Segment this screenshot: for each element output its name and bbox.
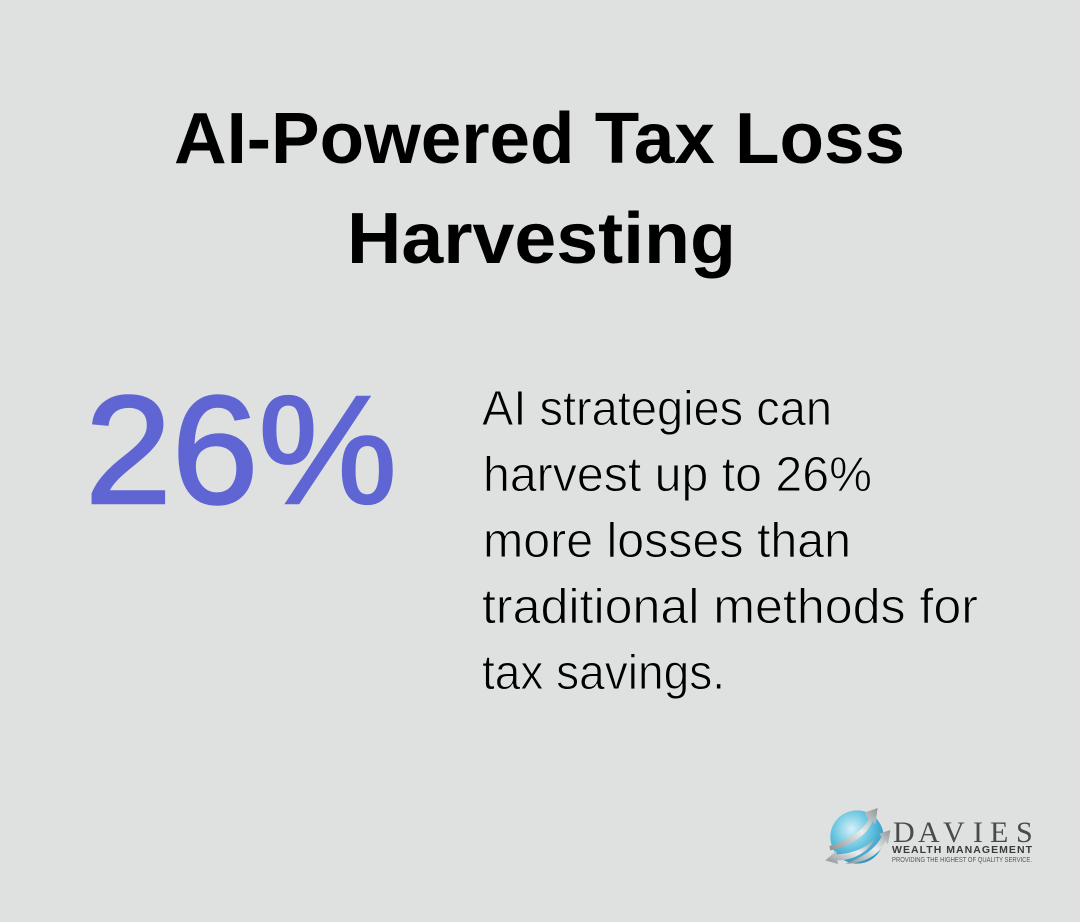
logo tagline: PROVIDING THE HIGHEST OF QUALITY SERVICE. [892, 855, 1032, 864]
description text: more losses than [483, 514, 851, 568]
title [174, 99, 905, 279]
title: AI-Powered Tax Loss [174, 99, 905, 179]
big statistic: 26%: 26% [85, 364, 397, 536]
icon: globe with silver arrows [825, 808, 890, 864]
description text: traditional methods for [482, 580, 978, 634]
description text [482, 382, 978, 700]
description text: harvest up to 26% [483, 448, 872, 502]
description text: AI strategies can [482, 382, 832, 436]
title: Harvesting [347, 199, 736, 279]
description text: tax savings. [482, 646, 725, 700]
logo wordmark: DAVIES [893, 816, 1033, 849]
logo: Davies Wealth Management [825, 808, 1033, 864]
logo subtitle: WEALTH MANAGEMENT [892, 844, 1033, 856]
